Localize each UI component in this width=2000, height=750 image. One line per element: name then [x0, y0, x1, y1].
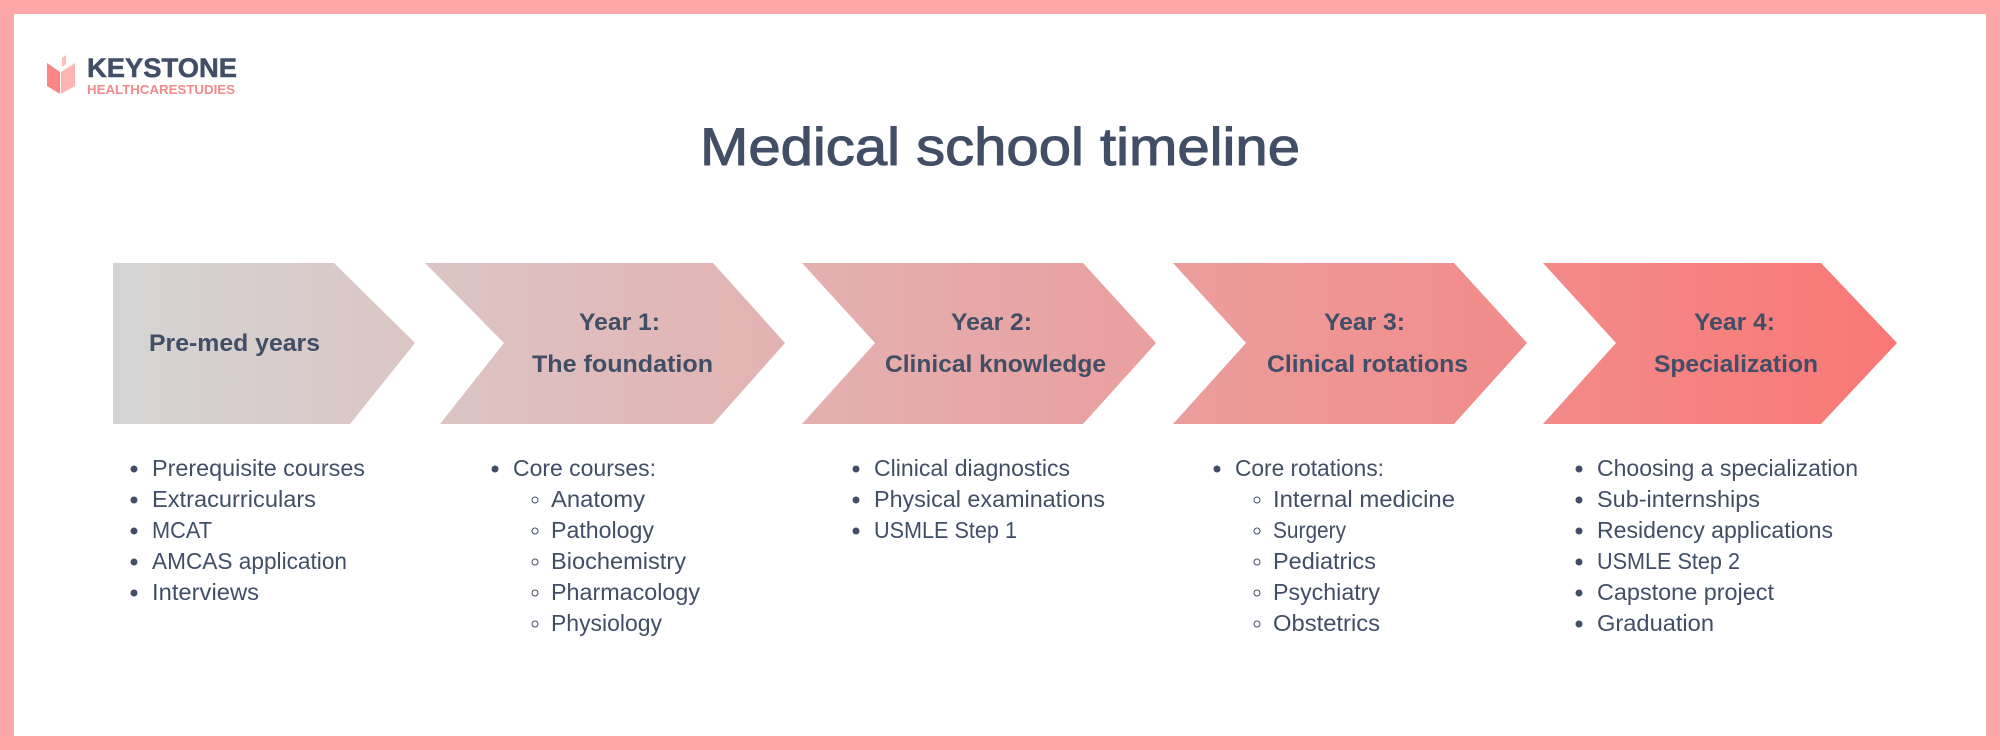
heading: Year 3: [1324, 309, 1405, 336]
list: year 2 [852, 455, 1105, 543]
list: year 2: Clinical diagnostics [874, 455, 1070, 481]
list: year 1: Biochemistry [551, 548, 686, 574]
heading: Year 2: [951, 309, 1032, 336]
list: year 4: Choosing a specialization [1597, 455, 1858, 481]
list: pre-med years: Extracurriculars [152, 486, 316, 512]
heading: Year 1: [579, 309, 660, 336]
chevron: year 1 [425, 263, 785, 424]
heading: Specialization [1654, 351, 1818, 378]
list: year 2: USMLE Step 1 [874, 517, 1017, 543]
list: year 4 [1576, 455, 1858, 636]
list: year 3: Internal medicine [1273, 486, 1455, 512]
list: pre-med years: Interviews [152, 579, 259, 605]
title: Medical school timeline [700, 118, 1300, 177]
list: year 3: Psychiatry [1273, 579, 1380, 605]
heading: Year 4: [1694, 309, 1775, 336]
list: year 4: Capstone project [1597, 579, 1775, 605]
chevron: pre-med years [113, 263, 415, 424]
list: year 3: Core rotations: [1235, 455, 1384, 481]
list: pre-med years: Prerequisite courses [152, 455, 365, 481]
list: year 4: Residency applications [1597, 517, 1833, 543]
heading: Clinical knowledge [885, 351, 1106, 378]
list: pre-med years: AMCAS application [152, 548, 347, 574]
logo subtitle: HEALTHCARESTUDIES [87, 82, 235, 97]
list: year 1: Anatomy [551, 486, 646, 512]
list: year 1: Pathology [551, 517, 654, 543]
heading: The foundation [532, 351, 713, 378]
heading: Clinical rotations [1267, 351, 1468, 378]
heading: Pre-med years [149, 330, 320, 357]
chevron: year 3 [1173, 263, 1527, 424]
list: year 4: USMLE Step 2 [1597, 548, 1740, 574]
list: year 3: Obstetrics [1273, 610, 1380, 636]
list: pre-med years: MCAT [152, 517, 212, 543]
list: pre-med years [130, 455, 365, 605]
list: year 1: Core courses: [513, 455, 656, 481]
icon: open book [47, 55, 75, 94]
logo wordmark: KEYSTONE [87, 53, 237, 83]
list: year 2: Physical examinations [874, 486, 1105, 512]
chevron: year 2 [802, 263, 1156, 424]
list: year 3: Surgery [1273, 517, 1346, 543]
list: year 4: Graduation [1597, 610, 1714, 636]
list: year 3: Pediatrics [1273, 548, 1376, 574]
list: year 1 [492, 455, 700, 636]
logo [47, 53, 237, 97]
list: year 1: Pharmacology [551, 579, 700, 605]
list: year 3 [1214, 455, 1455, 636]
list: year 4: Sub-internships [1597, 486, 1760, 512]
chevron: year 4 [1543, 263, 1897, 424]
list: year 1: Physiology [551, 610, 662, 636]
